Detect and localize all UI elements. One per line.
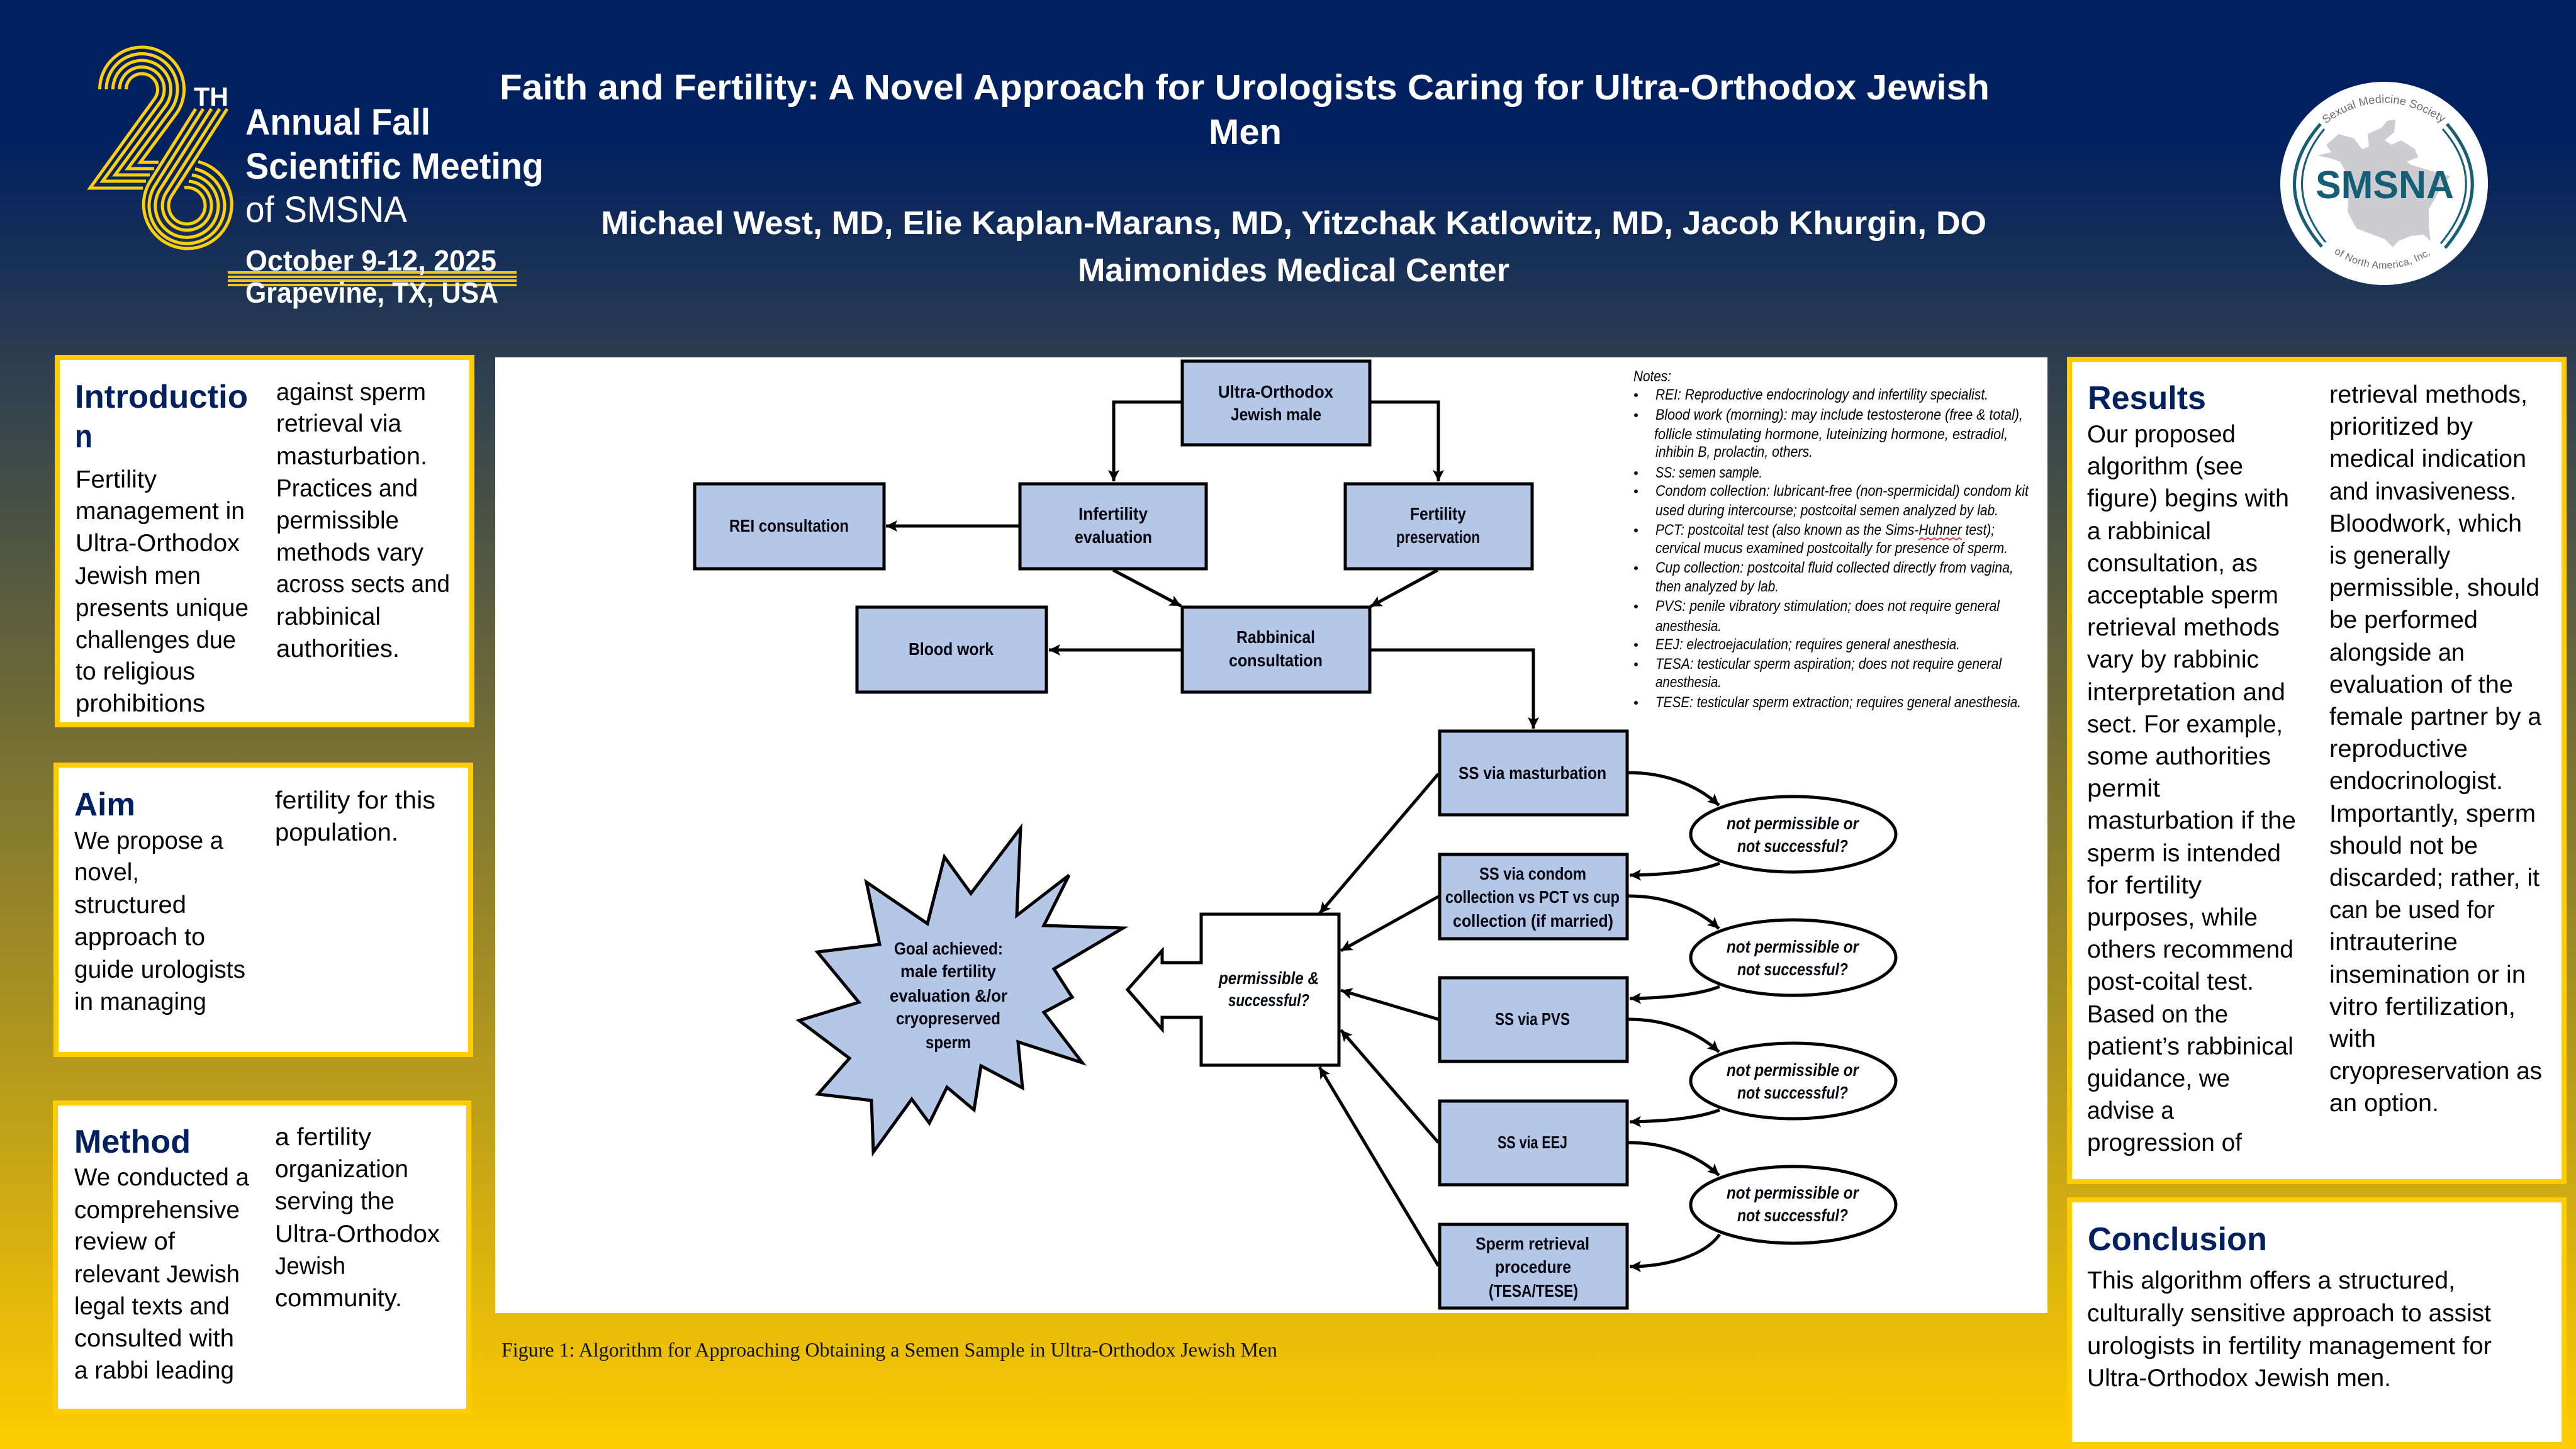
results text column 1: acceptable sperm [2087, 582, 2278, 609]
notes block: Cup collection: postcoital fluid collected directly from vagina, [1655, 559, 2013, 576]
logo SMSNA wordmark: SMSNA [2316, 164, 2454, 207]
conference logo: 26th Annual Fall Scientific Meeting [90, 47, 544, 309]
results text column 2: reproductive [2329, 736, 2468, 763]
results text column 1: consultation, as [2087, 550, 2258, 577]
method text column 2: Jewish [275, 1253, 345, 1280]
aim text column 1: We propose a [74, 827, 223, 854]
panel: method [55, 1103, 469, 1411]
logo TH superscript: TH [194, 82, 228, 111]
results text column 1: a rabbinical [2087, 518, 2211, 545]
notes block: anesthesia. [1655, 674, 1722, 691]
results text column 1: post-coital test. [2087, 968, 2254, 995]
results text column 1: figure) begins with [2087, 485, 2289, 512]
aim text column 2: fertility for this [275, 787, 435, 814]
results text column 1: some authorities [2087, 743, 2271, 770]
box: Rabbinical consultation: Rabbinical [1236, 627, 1315, 647]
introduction text column 1: to religious [76, 658, 195, 685]
notes block: EEJ: electroejaculation; requires general anesthesia. [1655, 636, 1960, 653]
notes block: PCT: postcoital test (also known as the Sims-Huhner test); [1655, 522, 1995, 539]
notes block: SS: semen sample. [1655, 464, 1762, 481]
decision oval 4: not permissible or [1727, 1183, 1860, 1202]
results text column 1 [2087, 421, 2296, 1156]
results text column 2: vitro fertilization, [2329, 993, 2516, 1021]
method text column 1: comprehensive [74, 1197, 240, 1224]
introduction text column 1: presents unique [76, 595, 249, 622]
introduction text column 1: Jewish men [75, 562, 201, 590]
introduction text column 2: authorities. [276, 635, 400, 663]
notes block: Blood work (morning): may include testosterone (free & total), [1655, 406, 2023, 423]
results text column 1: purposes, while [2087, 904, 2258, 931]
starburst: goal achieved: cryopreserved [896, 1009, 1000, 1028]
box: Rabbinical consultation: consultation [1229, 651, 1323, 670]
results text column 2: be performed [2329, 607, 2478, 634]
aim heading: Aim [74, 786, 135, 823]
box: Ultra-Orthodox Jewish male [1182, 361, 1370, 445]
title [500, 67, 1990, 152]
decision oval 4: not successful? [1737, 1206, 1848, 1225]
results text column 2: can be used for [2329, 897, 2495, 924]
notes block [1633, 368, 2029, 711]
results text column 2: permissible, should [2329, 574, 2540, 601]
method text column 1: review of [74, 1228, 175, 1255]
box: Sperm retrieval procedure [1440, 1224, 1627, 1308]
arrow callout: permissible and successful: successful? [1228, 990, 1309, 1010]
results text column 1: permit [2087, 775, 2160, 802]
arrow callout: permissible and successful: permissible & [1218, 968, 1319, 988]
notes block: follicle stimulating hormone, luteinizing hormone, estradiol, [1654, 426, 2008, 443]
results text column 1: interpretation and [2087, 679, 2285, 706]
box: Fertility preservation: preservation [1396, 527, 1480, 547]
box: Sperm retrieval procedure: procedure [1495, 1257, 1571, 1277]
starburst: goal achieved: Goal achieved: [894, 939, 1003, 958]
box: Infertility evaluation: evaluation [1075, 527, 1152, 547]
aim text column 1 [74, 827, 245, 1015]
introduction text column 1: Fertility [76, 466, 157, 493]
conclusion text: urologists in fertility management for [2087, 1333, 2492, 1360]
logo date and location: October 9-12, 2025 [245, 244, 496, 277]
notes block: cervical mucus examined postcoitally for presence of sperm. [1655, 540, 2008, 557]
box: SS via EEJ: SS via EEJ [1498, 1133, 1567, 1152]
decision oval 1: not permissible or [1727, 814, 1860, 833]
results text column 2: with [2329, 1026, 2376, 1053]
notes block: inhibin B, prolactin, others. [1655, 444, 1813, 461]
title: Faith and Fertility: A Novel Approach for Urologists Caring for Ultra-Orthodox Jewish [500, 67, 1990, 108]
results text column 1: retrieval methods [2087, 614, 2280, 641]
notes block: TESA: testicular sperm aspiration; does not require general [1655, 656, 2002, 673]
notes block: TESE: testicular sperm extraction; requires general anesthesia. [1655, 694, 2021, 711]
aim text column 1: novel, [74, 859, 139, 886]
box: Blood work [857, 607, 1046, 692]
results text column 1: masturbation if the [2087, 807, 2296, 834]
introduction text column 2: across sects and [276, 571, 450, 598]
box: SS via condom collection vs PCT vs cup collection: SS via condom [1479, 864, 1586, 883]
results text column 2: Bloodwork, which [2329, 510, 2522, 537]
notes block: PVS: penile vibratory stimulation; does not require general [1655, 598, 2000, 615]
method text column 2: serving the [275, 1188, 395, 1215]
introduction heading [75, 379, 248, 455]
figure white background [495, 357, 2047, 1313]
box: Blood work: Blood work [909, 639, 994, 659]
results text column 2: prioritized by [2329, 413, 2473, 440]
arrow callout: permissible and successful [1128, 914, 1339, 1065]
conclusion text [2087, 1267, 2492, 1392]
introduction text column 1 [75, 466, 249, 717]
results text column 2: intrauterine [2329, 929, 2458, 956]
connector arrows [886, 402, 1720, 1267]
results text column 2: alongside an [2329, 639, 2465, 666]
logo stripes [228, 271, 517, 286]
box: SS via PVS: SS via PVS [1495, 1009, 1570, 1029]
notes block: then analyzed by lab. [1655, 578, 1779, 595]
logo numeral 2 [90, 47, 184, 188]
results text column 2: endocrinologist. [2329, 768, 2503, 795]
box: Infertility evaluation: Infertility [1078, 504, 1148, 523]
logo numeral 6 [143, 109, 232, 249]
method text column 2: organization [275, 1156, 408, 1183]
introduction heading: n [75, 418, 92, 455]
logo white oval [2280, 82, 2488, 285]
conclusion text: Ultra-Orthodox Jewish men. [2087, 1365, 2391, 1392]
results text column 1: advise a [2087, 1097, 2174, 1124]
panel: results [2069, 359, 2564, 1182]
box: REI consultation [695, 484, 884, 569]
notes block: anesthesia. [1655, 618, 1722, 635]
institution: Maimonides Medical Center [1078, 252, 1509, 289]
box: Sperm retrieval procedure: (TESA/TESE) [1489, 1281, 1578, 1301]
results text column 1: sperm is intended [2087, 840, 2281, 867]
panel: conclusion [2069, 1200, 2564, 1445]
results text column 1: Our proposed [2087, 421, 2236, 448]
logo meeting name: Annual Fall [245, 102, 430, 143]
method text column 2: Ultra-Orthodox [275, 1221, 440, 1248]
method text column 2: community. [275, 1285, 402, 1312]
box: Fertility preservation [1345, 484, 1532, 569]
aim text column 2 [275, 787, 435, 846]
results text column 2: discarded; rather, it [2329, 864, 2540, 892]
logo date and location [245, 244, 498, 309]
figure caption: Figure 1: Algorithm for Approaching Obtaining a Semen Sample in Ultra-Orthodox Jewish Men [501, 1338, 1277, 1361]
results text column 2: insemination or in [2329, 961, 2526, 988]
results text column 2: is generally [2329, 542, 2450, 569]
method text column 1: We conducted a [74, 1164, 249, 1191]
box: Rabbinical consultation [1182, 607, 1370, 692]
notes block: used during intercourse; postcoital semen analyzed by lab. [1655, 502, 1998, 519]
decision oval 1: not successful? [1737, 836, 1848, 856]
decision oval 3 [1691, 1043, 1896, 1119]
results text column 2: and invasiveness. [2329, 478, 2516, 505]
conclusion text: culturally sensitive approach to assist [2087, 1300, 2491, 1327]
panel: figure flowchart [495, 357, 2047, 1313]
starburst: goal achieved [799, 828, 1123, 1152]
aim text column 1: structured [74, 892, 186, 919]
method text column 1 [74, 1164, 249, 1384]
box: SS via masturbation [1440, 731, 1627, 815]
logo meeting name: Scientific Meeting [245, 146, 544, 187]
decision oval 2: not successful? [1737, 959, 1848, 979]
introduction text column 2 [276, 379, 450, 663]
box: Ultra-Orthodox Jewish male: Ultra-Orthodox [1218, 382, 1333, 401]
panel: aim [56, 765, 471, 1055]
results text column 2: medical indication [2329, 445, 2526, 473]
introduction text column 1: Ultra-Orthodox [76, 530, 240, 557]
method text column 1: a rabbi leading [74, 1357, 234, 1384]
starburst: goal achieved: sperm [926, 1032, 971, 1052]
logo meeting name [245, 102, 544, 230]
box: SS via masturbation: SS via masturbation [1459, 763, 1606, 783]
box: SS via condom collection vs PCT vs cup collection [1440, 854, 1627, 939]
introduction text column 2: permissible [276, 507, 399, 534]
notes block: REI: Reproductive endocrinology and infertility specialist. [1655, 386, 1988, 403]
results text column 1: sect. For example, [2087, 711, 2283, 738]
notes block: Condom collection: lubricant-free (non-spermicidal) condom kit [1655, 483, 2029, 500]
box: Infertility evaluation [1020, 484, 1206, 569]
decision oval 2 [1691, 920, 1896, 995]
box: Fertility preservation: Fertility [1410, 504, 1466, 523]
results text column 1: vary by rabbinic [2087, 646, 2259, 673]
method text column 1: legal texts and [74, 1293, 230, 1320]
box: Sperm retrieval procedure: Sperm retrieval [1476, 1234, 1589, 1253]
notes block: Notes: [1633, 368, 1671, 385]
starburst: goal achieved: evaluation &/or [890, 986, 1007, 1005]
results text column 2: female partner by a [2329, 703, 2541, 730]
box: SS via condom collection vs PCT vs cup collection: collection vs PCT vs cup [1445, 887, 1620, 907]
introduction text column 2: rabbinical [276, 603, 381, 630]
decision oval 3: not permissible or [1727, 1060, 1860, 1080]
introduction text column 1: management in [76, 498, 245, 525]
decision oval 2: not permissible or [1727, 937, 1860, 956]
box: REI consultation: REI consultation [729, 516, 849, 535]
decision oval 3: not successful? [1737, 1083, 1848, 1102]
results text column 2 [2329, 381, 2542, 1117]
box: SS via condom collection vs PCT vs cup collection: collection (if married) [1453, 911, 1613, 931]
method heading: Method [74, 1124, 191, 1160]
logo curved region name: of North America, Inc. [2335, 249, 2430, 269]
results heading: Results [2088, 380, 2206, 417]
aim text column 1: guide urologists [74, 956, 245, 983]
results text column 1: patient’s rabbinical [2087, 1033, 2293, 1060]
aim text column 1: approach to [74, 924, 205, 951]
results text column 2: evaluation of the [2329, 671, 2513, 698]
conclusion heading: Conclusion [2088, 1221, 2267, 1258]
introduction text column 1: prohibitions [76, 690, 205, 717]
SMSNA society logo [2280, 82, 2488, 285]
introduction text column 1: challenges due [76, 627, 236, 654]
results text column 1: guidance, we [2087, 1065, 2230, 1092]
results text column 1: progression of [2087, 1129, 2242, 1156]
method text column 1: consulted with [74, 1325, 234, 1352]
starburst: goal achieved: male fertility [900, 961, 996, 981]
aim text column 2: population. [275, 819, 398, 846]
results text column 1: Based on the [2087, 1001, 2228, 1028]
logo meeting name: of SMSNA [245, 189, 407, 230]
results text column 1: others recommend [2087, 936, 2293, 963]
box: SS via EEJ [1440, 1101, 1627, 1185]
logo double ring arcs [2294, 124, 2472, 248]
introduction text column 2: against sperm [276, 379, 426, 406]
results text column 2: an option. [2329, 1090, 2439, 1117]
results text column 1: algorithm (see [2087, 453, 2243, 480]
authors: Michael West, MD, Elie Kaplan-Marans, MD, Yitzchak Katlowitz, MD, Jacob Khurgin, DO [601, 205, 1986, 242]
introduction text column 2: methods vary [276, 539, 423, 566]
box: SS via PVS [1440, 978, 1627, 1061]
title: Men [1209, 112, 1282, 152]
method text column 2 [275, 1124, 440, 1312]
decision oval 1 [1691, 797, 1896, 872]
introduction text column 2: masturbation. [276, 443, 427, 470]
results text column 2: retrieval methods, [2329, 381, 2528, 408]
method text column 1: relevant Jewish [74, 1261, 240, 1288]
decision oval 4 [1691, 1166, 1896, 1243]
results text column 2: should not be [2329, 832, 2478, 859]
results text column 1: for fertility [2087, 872, 2202, 899]
method text column 2: a fertility [275, 1124, 372, 1151]
logo map of North America [2317, 120, 2450, 247]
results text column 2: Importantly, sperm [2329, 800, 2536, 827]
introduction text column 2: retrieval via [276, 410, 401, 437]
introduction text column 2: Practices and [276, 475, 418, 502]
conclusion text: This algorithm offers a structured, [2087, 1267, 2455, 1294]
results text column 2: cryopreservation as [2329, 1058, 2542, 1085]
introduction heading: Introductio [75, 379, 248, 415]
panel: introduction [57, 357, 472, 725]
box: Ultra-Orthodox Jewish male: Jewish male [1231, 405, 1321, 424]
aim text column 1: in managing [74, 988, 206, 1015]
logo date and location: Grapevine, TX, USA [245, 276, 498, 309]
logo curved society name: Sexual Medicine Society [2322, 94, 2446, 123]
